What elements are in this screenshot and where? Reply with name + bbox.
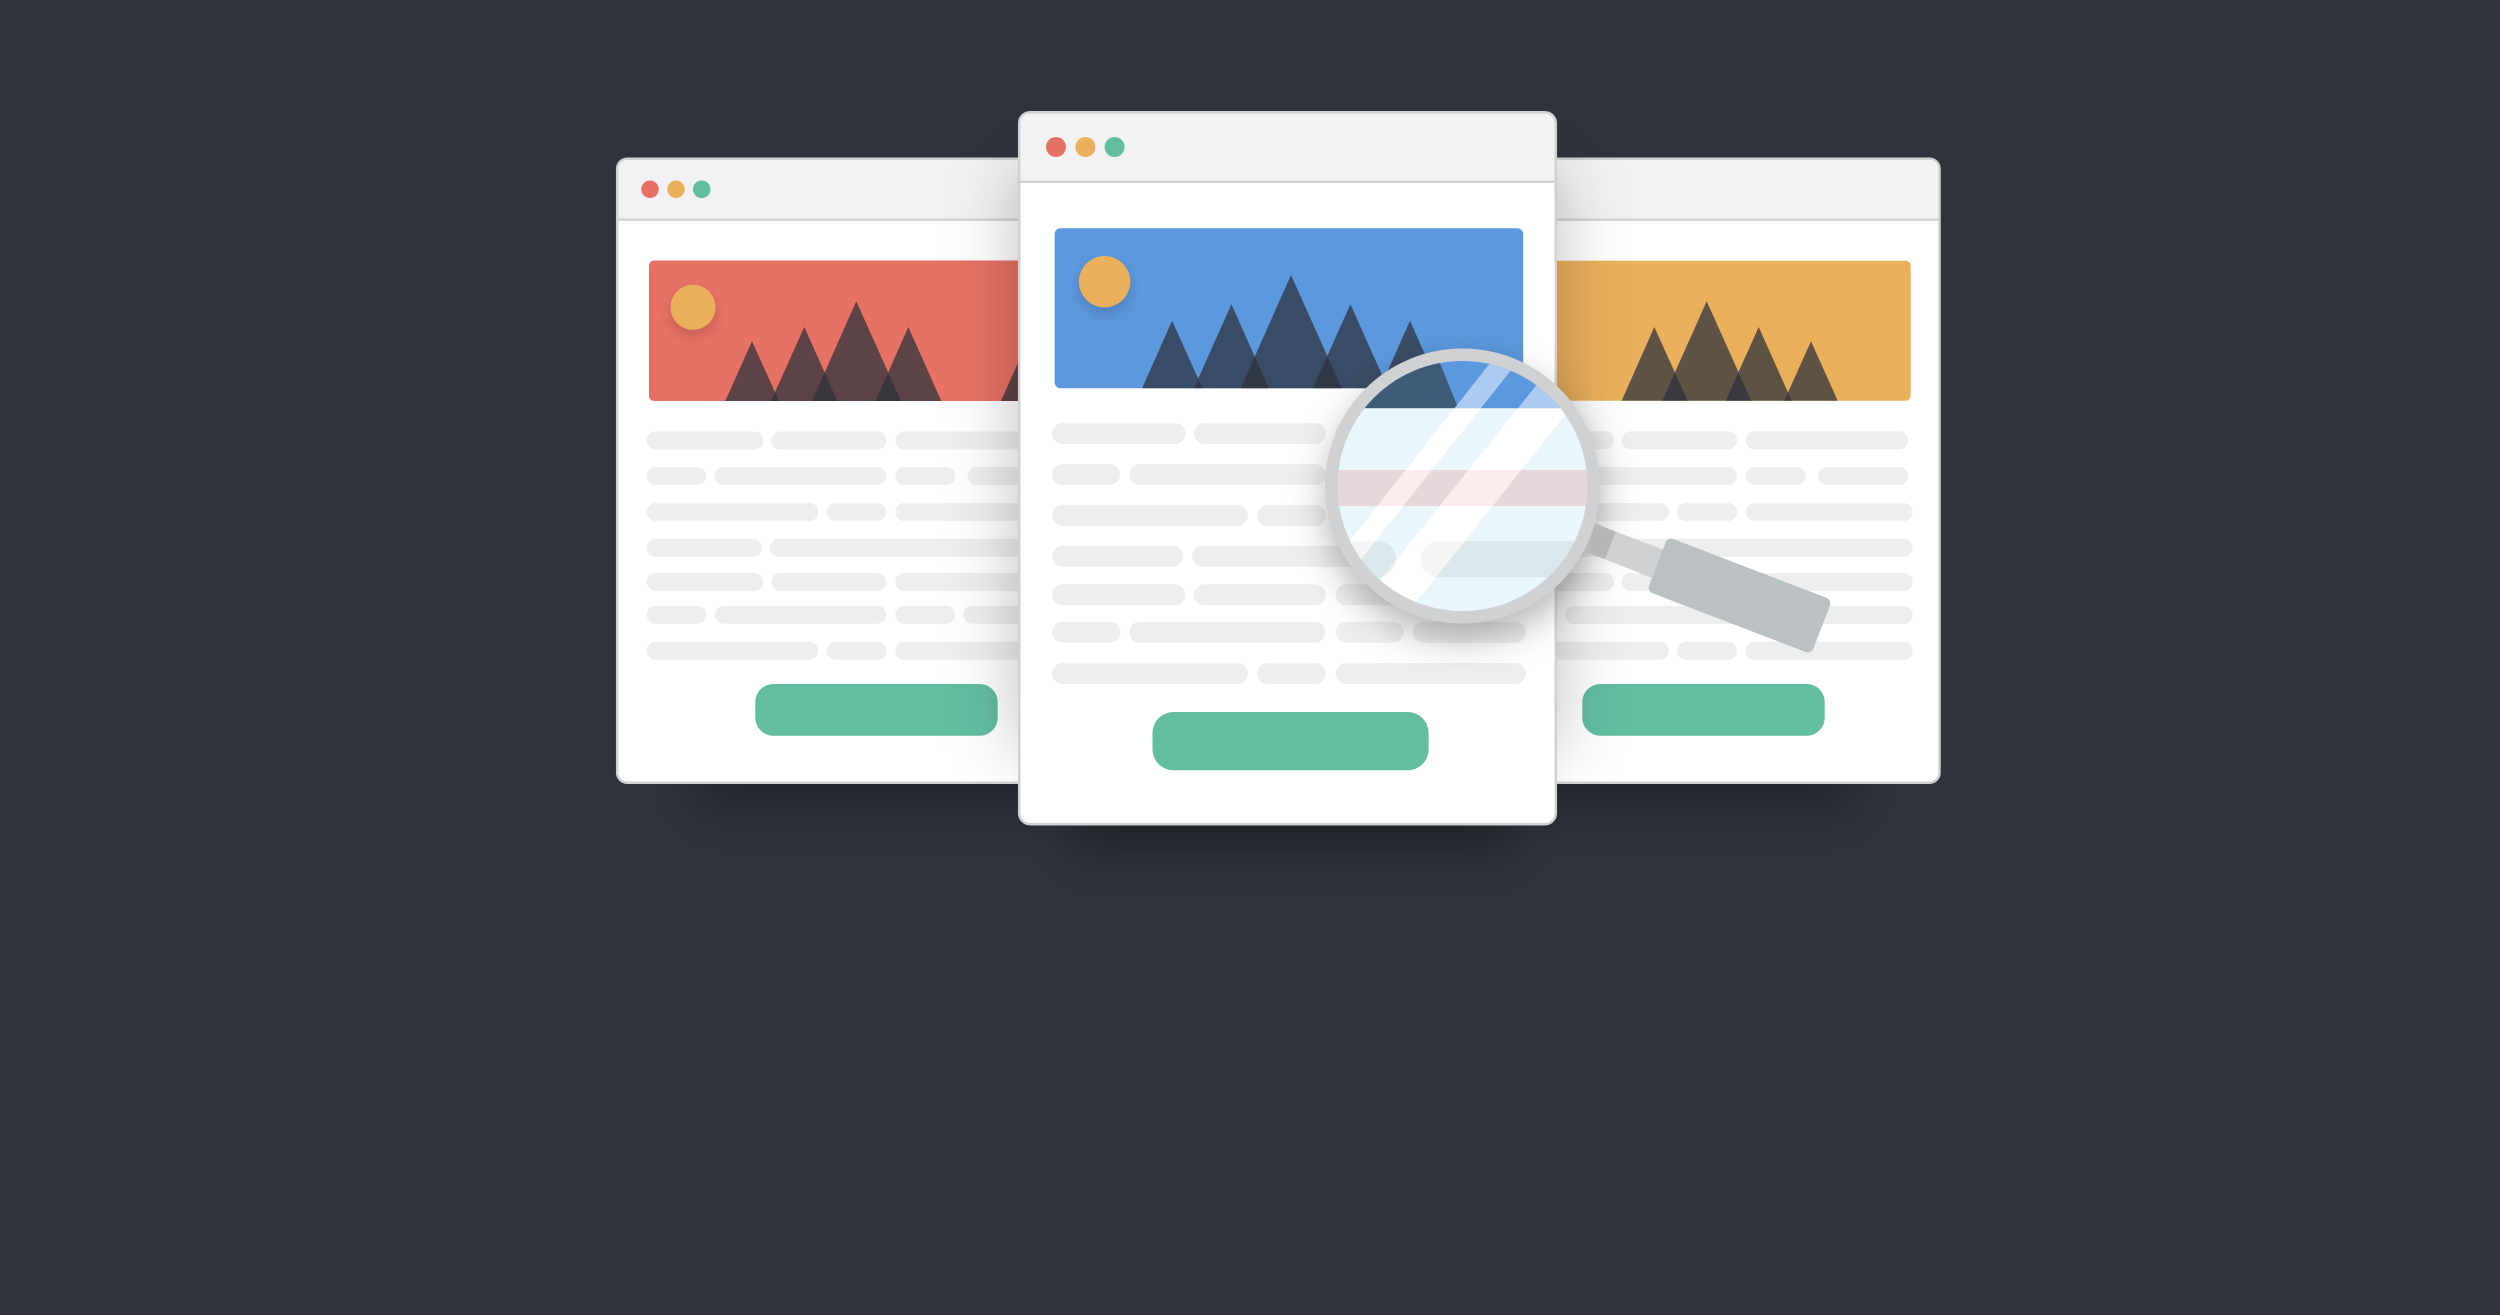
title bar rule [1401,218,1938,221]
shadow: side windows on background [695,700,1855,808]
window frame [617,159,1177,783]
magnified image band [1364,361,1560,408]
window frame [1400,159,1940,783]
glare stripe one [1350,364,1510,559]
text placeholder lines [1500,431,1913,660]
title bar [618,160,1176,218]
lens ring [1325,348,1600,624]
text placeholder lines [647,432,1065,660]
image placeholder: orange landscape [1480,261,1911,401]
title bar [1020,114,1554,181]
button [755,684,998,736]
window frame [1019,112,1556,824]
magnified mountain [1364,363,1457,408]
image placeholder: red landscape [649,260,1069,401]
image placeholder: blue landscape [1055,228,1523,388]
text placeholder lines [1052,423,1526,684]
title bar rule [1020,181,1554,183]
window control dots [641,180,710,198]
icon: magnifying glass [1325,348,1830,652]
lens contents, magnified [1338,361,1588,611]
panel: center browser window [1019,112,1556,824]
magnified highlight band [1330,470,1600,506]
title bar [1401,160,1938,218]
magnified text line pieces [1362,542,1574,577]
shadow: magnifier [1326,366,1598,638]
handle neck [1585,523,1664,578]
panel: right browser window [1400,159,1940,783]
button [1152,712,1429,770]
window control dots [1046,137,1125,157]
button [1582,684,1825,736]
illustration: three browser windows and magnifier [616,111,1941,854]
shadow: center window on side windows [1018,165,1557,750]
panel: left browser window [617,159,1177,783]
handle grip [1647,537,1832,654]
tinted lens band [1338,408,1588,611]
title bar rule [618,218,1176,221]
glare stripe two [1380,385,1565,602]
shadow: center window on background [1070,740,1515,852]
